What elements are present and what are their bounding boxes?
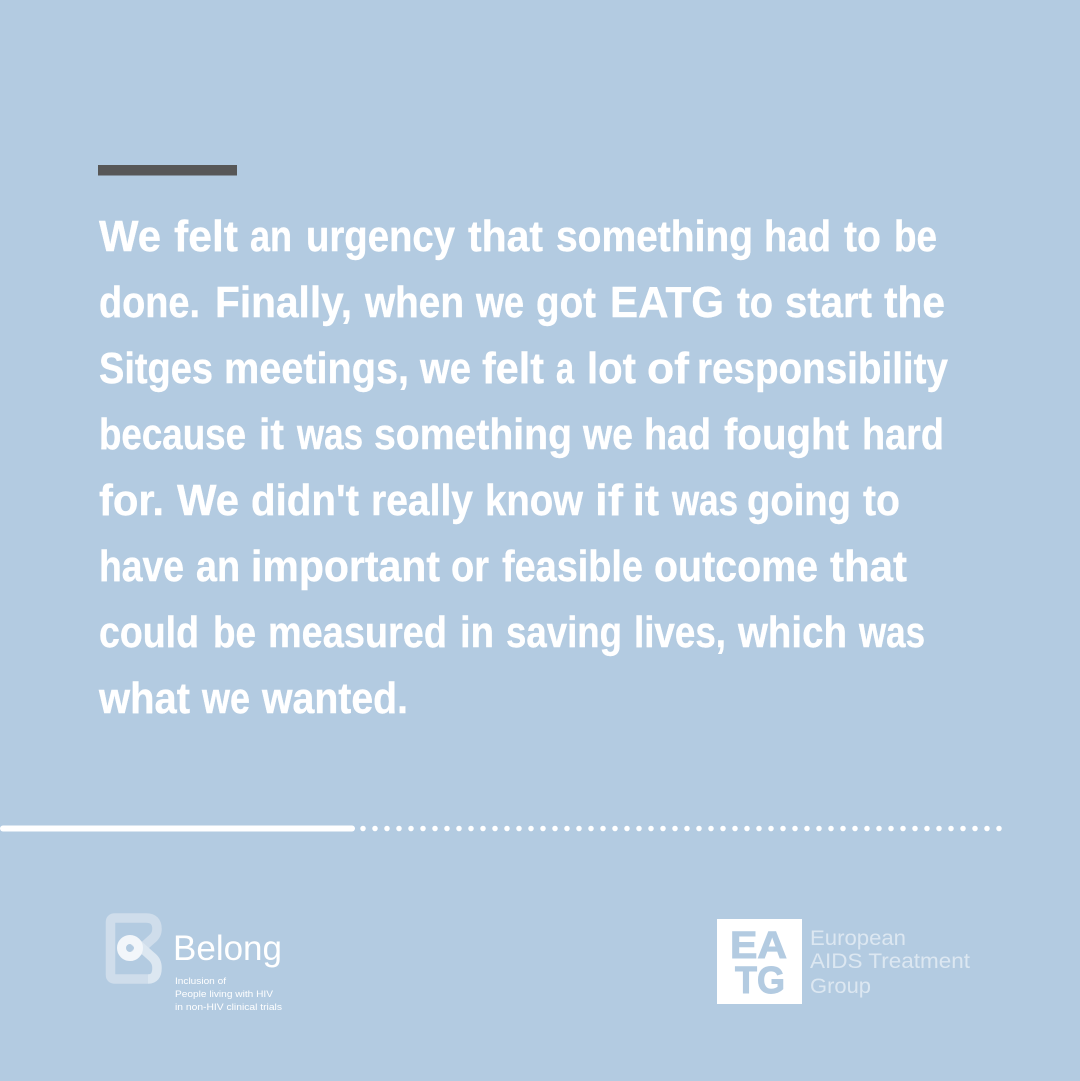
quote text: wanted.: [261, 674, 408, 723]
quote text: we: [419, 344, 471, 393]
logo letters: [730, 925, 787, 1002]
quote text: to: [737, 278, 773, 327]
quote text: which: [737, 608, 847, 657]
quote text: We: [177, 476, 239, 525]
quote text: lot: [587, 344, 636, 393]
quote text: an: [250, 212, 292, 261]
quote text: had: [644, 410, 711, 459]
quote text: Finally,: [215, 278, 352, 327]
quote text: feasible: [502, 542, 643, 591]
quote text: done.: [99, 278, 200, 327]
quote text: [98, 212, 948, 723]
quote text: start: [785, 278, 872, 327]
quote text: something: [556, 212, 753, 261]
logo wordmark: AIDS Treatment: [810, 950, 970, 973]
quote text: EATG: [610, 278, 724, 327]
quote text: got: [536, 278, 596, 327]
quote text: outcome: [654, 542, 818, 591]
quote text: if: [595, 476, 623, 525]
quote text: could: [99, 608, 199, 657]
quote text: what: [98, 674, 190, 723]
quote text: lives,: [634, 608, 726, 657]
logo wordmark: Group: [810, 975, 871, 998]
quote text: the: [884, 278, 945, 327]
quote text: didn't: [251, 476, 359, 525]
divider line with dots: [0, 826, 1000, 832]
quote text: for.: [99, 476, 164, 525]
quote text: hard: [862, 410, 944, 459]
logo tagline: [175, 976, 282, 1013]
logo letters: EA: [730, 925, 787, 967]
quote text: because: [99, 410, 246, 459]
quote text: it: [259, 410, 284, 459]
Belong logo: [110, 918, 282, 1013]
quote text: it: [633, 476, 659, 525]
quote text: be: [213, 608, 256, 657]
logo square: [717, 919, 802, 1004]
quote text: have: [99, 542, 184, 591]
quote text: of: [647, 344, 689, 393]
quote text: urgency: [306, 212, 455, 261]
quote text: that: [468, 212, 543, 261]
quote text: we: [475, 278, 524, 327]
logo tagline: in non-HIV clinical trials: [175, 1002, 282, 1013]
quote text: something: [374, 410, 572, 459]
icon: Belong B mark: [110, 918, 157, 979]
quote text: felt: [174, 212, 238, 261]
logo tagline: Inclusion of: [175, 976, 226, 987]
quote text: Sitges: [99, 344, 213, 393]
quote text: We: [99, 212, 161, 261]
accent bar: [98, 165, 237, 176]
quote text: was: [671, 476, 738, 525]
quote text: an: [196, 542, 240, 591]
quote text: fought: [724, 410, 849, 459]
quote text: felt: [482, 344, 544, 393]
quote text: we: [201, 674, 250, 723]
quote text: was: [858, 608, 925, 657]
quote text: was: [296, 410, 363, 459]
quote text: important: [251, 542, 440, 591]
logo tagline: People living with HIV: [175, 989, 274, 1000]
quote text: we: [582, 410, 633, 459]
quote text: measured: [268, 608, 447, 657]
quote text: to: [863, 476, 900, 525]
quote text: responsibility: [697, 344, 948, 393]
EATG logo: [717, 919, 970, 1004]
quote text: had: [764, 212, 831, 261]
quote text: a: [556, 344, 574, 393]
logo wordmark: [810, 927, 970, 998]
logo wordmark: European: [810, 927, 906, 950]
quote text: in: [460, 608, 494, 657]
quote text: going: [747, 476, 851, 525]
quote text: meetings,: [224, 344, 409, 393]
quote text: know: [485, 476, 584, 525]
logo letters: TG: [735, 960, 785, 1002]
quote text: when: [364, 278, 464, 327]
quote text: that: [830, 542, 907, 591]
quote text: be: [894, 212, 937, 261]
logo name: Belong: [173, 929, 282, 968]
quote text: really: [371, 476, 473, 525]
quote text: saving: [506, 608, 622, 657]
quote text: to: [844, 212, 881, 261]
quote text: or: [451, 542, 489, 591]
